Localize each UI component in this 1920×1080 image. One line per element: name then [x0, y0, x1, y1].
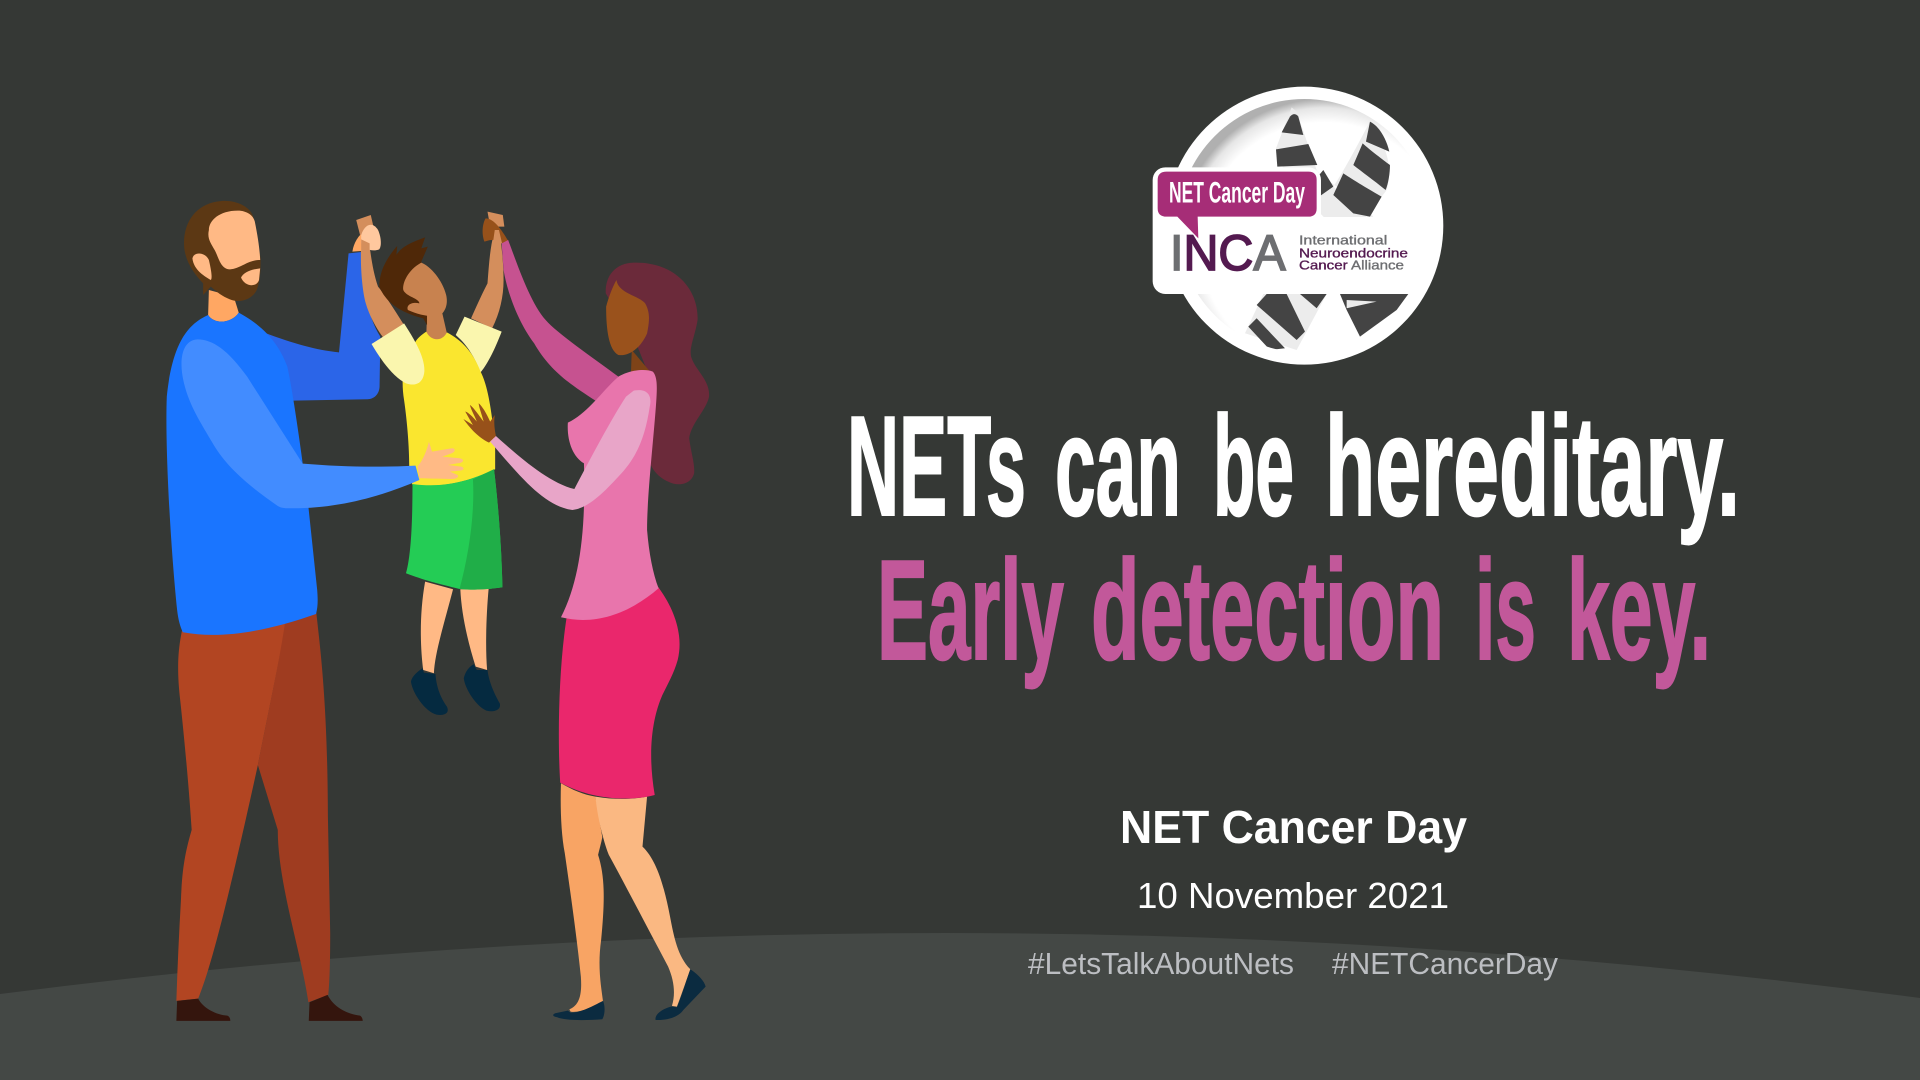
- woman legs and skirt: [553, 585, 706, 1020]
- woman raised arm: [502, 240, 618, 401]
- joined hands left: [352, 215, 381, 252]
- headline line 1: NETs: [847, 387, 1026, 546]
- man trousers and shoes: [176, 610, 363, 1021]
- man front arm and hand: [181, 339, 464, 508]
- front leg: [595, 797, 690, 1007]
- man mouth: [241, 268, 260, 285]
- child hair: [379, 237, 431, 325]
- hashtag 1: #LetsTalkAboutNets: [1028, 946, 1294, 981]
- INCA wordmark: INCA: [1170, 225, 1286, 281]
- man face: [208, 211, 260, 269]
- man hand on child: [417, 442, 464, 479]
- ground hill: [0, 933, 1920, 1080]
- child legs: [421, 582, 489, 673]
- zebra ribbon: [1245, 107, 1408, 350]
- child shirt: [403, 332, 495, 486]
- child neck: [426, 313, 447, 340]
- woman front arm: [490, 390, 650, 510]
- alliance name: Cancer Alliance: [1299, 259, 1404, 273]
- woman hair: [606, 263, 709, 484]
- hashtag 2: #NETCancerDay: [1332, 946, 1558, 981]
- logo badge: [1153, 87, 1443, 365]
- man right shoe: [309, 995, 363, 1021]
- man ear: [192, 254, 212, 280]
- woman neck: [631, 350, 651, 373]
- headline line 1: be: [1213, 387, 1294, 546]
- front trouser leg: [176, 620, 285, 1001]
- speech bubble: [1158, 172, 1317, 238]
- child shoes: [411, 664, 500, 715]
- man raised arm: [266, 252, 380, 401]
- man left shoe: [176, 999, 230, 1021]
- back trouser leg: [258, 610, 330, 1002]
- woman front shoe: [655, 969, 706, 1020]
- illustration: family: [166, 201, 709, 1021]
- child shorts: [406, 469, 502, 590]
- headline line 2: detection: [1091, 531, 1444, 690]
- alliance name: International: [1299, 234, 1387, 248]
- woman back shoe: [553, 1001, 605, 1020]
- headline line 2: Early: [877, 531, 1064, 690]
- woman hand on child: [463, 403, 496, 443]
- man torso: [166, 313, 318, 635]
- child front sleeve: [372, 323, 424, 385]
- woman figure: [463, 240, 709, 1020]
- woman face: [606, 280, 649, 355]
- headline line 1: [847, 387, 1740, 546]
- man neck: [208, 290, 239, 322]
- child figure: [352, 212, 508, 715]
- white band: [1153, 167, 1425, 294]
- man figure: [166, 201, 380, 1021]
- event name: NET Cancer Day: [1120, 801, 1467, 853]
- man hair and beard: [184, 201, 261, 301]
- alliance name: Neuroendocrine: [1299, 246, 1408, 260]
- child arms: [361, 233, 504, 340]
- child face: [403, 263, 447, 317]
- headline line 2: key.: [1567, 531, 1711, 690]
- skirt: [559, 585, 680, 799]
- back leg: [561, 783, 604, 1012]
- inner shaded disc: [1178, 99, 1431, 352]
- man front arm: [181, 339, 419, 508]
- child shorts shade: [460, 469, 502, 590]
- headline line 2: is: [1475, 531, 1536, 690]
- headline line 1: can: [1055, 387, 1181, 546]
- joined hands right: [483, 212, 508, 243]
- woman top: [561, 370, 659, 620]
- white ring: [1165, 87, 1443, 365]
- event date: 10 November 2021: [1137, 875, 1449, 916]
- child back sleeve: [456, 317, 502, 372]
- bubble text: NET Cancer Day: [1169, 177, 1305, 210]
- alliance name: [1299, 234, 1408, 273]
